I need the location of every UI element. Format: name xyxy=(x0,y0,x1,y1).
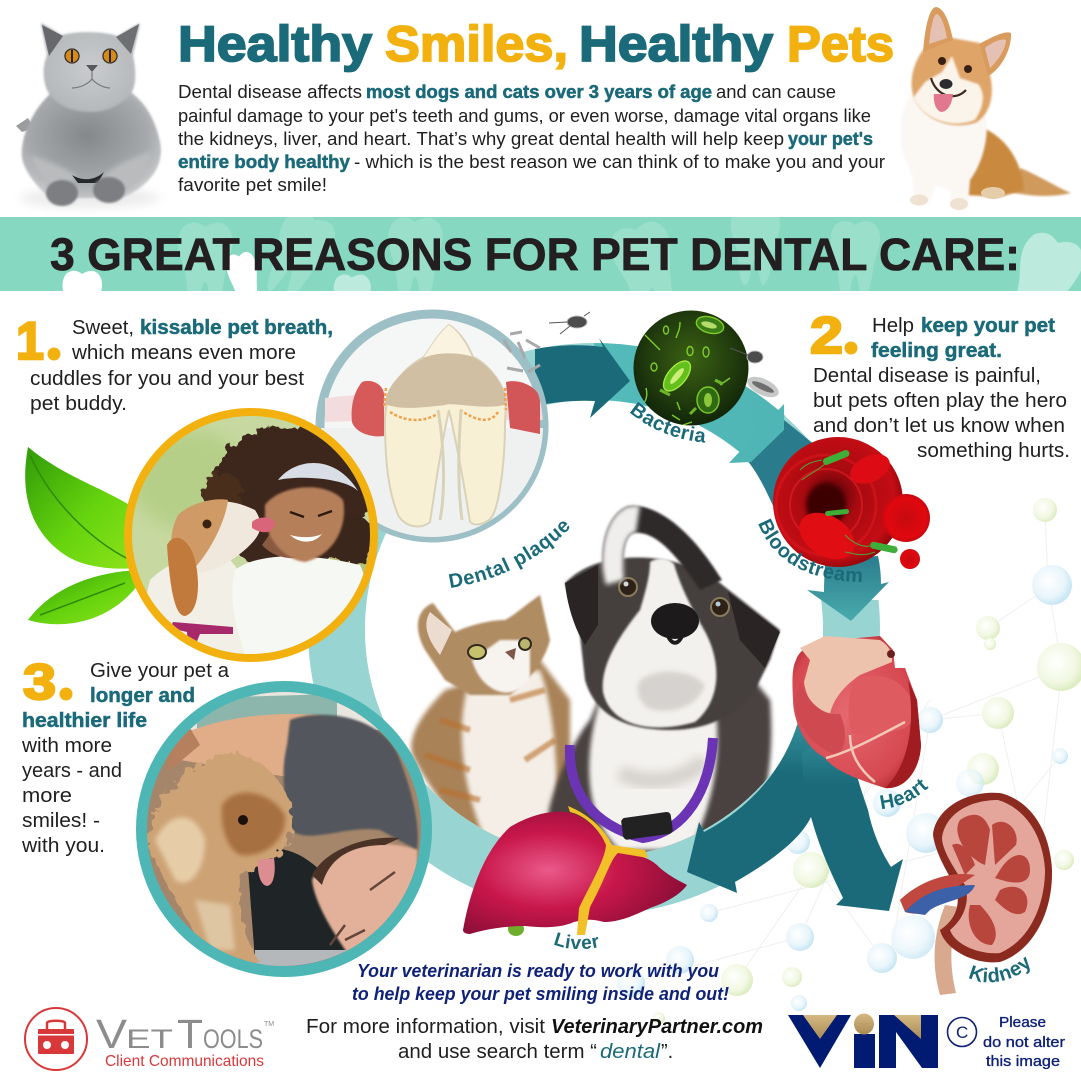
arrow: plaque to bacteria xyxy=(535,338,630,418)
VetTools logo: V xyxy=(96,1011,128,1057)
reason 2 text: Help xyxy=(872,315,914,337)
title: Healthy xyxy=(579,16,773,72)
copyright notice: this image xyxy=(986,1053,1060,1070)
banner xyxy=(0,205,1081,342)
VetTools logo: OOLS xyxy=(203,1024,263,1054)
more information text xyxy=(306,1016,763,1063)
copyright notice: C xyxy=(956,1023,968,1042)
curved organ labels xyxy=(448,402,1030,982)
reason 1 text: cuddles for you and your best xyxy=(30,368,304,390)
intro paragraph: and can cause xyxy=(716,82,836,102)
reason 3 text: longer and xyxy=(90,685,195,707)
fork arrows below heart xyxy=(687,722,903,911)
VetTools logo xyxy=(25,1008,274,1070)
arrow: heart to liver xyxy=(687,722,830,893)
puppy tail xyxy=(602,505,722,590)
copyright notice xyxy=(948,1014,1065,1070)
closing message: to help keep your pet smiling inside and out! xyxy=(352,984,729,1004)
VetTools logo: T xyxy=(177,1011,203,1057)
curved organ labels: Bloodstream xyxy=(758,518,862,582)
title: Smiles, xyxy=(385,16,568,72)
arrow: bacteria to bloodstream xyxy=(729,404,830,540)
intro paragraph: favorite pet smile! xyxy=(178,175,327,195)
leaves xyxy=(25,447,140,624)
plaque tooth illustration xyxy=(320,314,545,540)
reason 2 text xyxy=(810,307,1070,462)
title xyxy=(178,16,894,72)
copyright notice: Please xyxy=(999,1014,1046,1031)
photo: corgi xyxy=(900,7,1071,210)
VetTools logo: Client Communications xyxy=(105,1053,264,1070)
insects and grey bacterium xyxy=(549,312,782,401)
background molecule network xyxy=(617,498,1081,1024)
curved organ labels: Kidney xyxy=(968,956,1030,982)
more information text: ”. xyxy=(661,1041,673,1063)
cycle ring xyxy=(336,371,881,886)
arrow: bloodstream to heart xyxy=(807,556,889,621)
kitten xyxy=(411,595,570,850)
reason 3 text: healthier life xyxy=(22,710,147,732)
intro paragraph: the kidneys, liver, and heart. That’s why great dental health will help keep xyxy=(178,129,784,149)
title: Healthy xyxy=(178,16,372,72)
girl and dog photo circle xyxy=(120,405,390,667)
more information text: dental xyxy=(600,1041,661,1063)
reason 3 text: Give your pet a xyxy=(90,660,230,682)
reason 3 text: smiles! - xyxy=(22,810,100,832)
curved organ labels: Dental plaque xyxy=(448,522,570,588)
intro paragraph: - which is the best reason we can think of to make you and your xyxy=(354,152,885,172)
center photo: kitten and puppy xyxy=(365,557,825,861)
kidney xyxy=(900,793,1052,995)
reason 1 text: Sweet, xyxy=(72,317,134,339)
curved organ labels: Bacteria xyxy=(630,402,706,443)
reason 1 text: pet buddy. xyxy=(30,393,127,415)
bacteria sphere xyxy=(634,310,748,426)
reason 1 text xyxy=(16,312,333,415)
reason 2 text: but pets often play the hero xyxy=(813,390,1067,412)
VetTools logo: TM xyxy=(264,1021,274,1028)
arrow: heart to kidney xyxy=(802,730,903,911)
liver xyxy=(463,806,687,936)
reason 1 text: kissable pet breath, xyxy=(140,317,333,339)
reason 1 text: 1 xyxy=(16,312,44,371)
more information text: For more information, visit xyxy=(306,1016,545,1038)
intro paragraph xyxy=(178,82,885,195)
reason 3 text: years - and xyxy=(22,760,122,782)
closing message: Your veterinarian is ready to work with you xyxy=(357,961,719,981)
copyright notice: do not alter xyxy=(983,1034,1065,1051)
closing message xyxy=(352,961,729,1004)
reason 2 text: keep your pet xyxy=(921,315,1055,337)
title: Pets xyxy=(787,16,894,72)
more information text: and use search term “ xyxy=(398,1041,597,1063)
intro paragraph: entire body healthy xyxy=(178,152,350,172)
curved organ labels: Heart xyxy=(880,779,928,810)
reason 3 text: 3 xyxy=(23,654,56,710)
reason 3 text: with more xyxy=(21,735,112,757)
intro paragraph: painful damage to your pet's teeth and gums, or even worse, damage vital organs like xyxy=(178,106,871,126)
heart xyxy=(792,636,921,788)
man and poodle photo circle xyxy=(140,680,430,980)
reason 2 text: Dental disease is painful, xyxy=(813,365,1041,387)
VetTools logo: ET xyxy=(126,1024,173,1054)
reason 1 text: which means even more xyxy=(71,342,296,364)
intro paragraph: your pet's xyxy=(788,129,873,149)
more information text: VeterinaryPartner.com xyxy=(551,1016,763,1038)
photo: grey cat xyxy=(16,23,161,208)
reason 2 text: something hurts. xyxy=(917,440,1070,462)
bloodstream sphere xyxy=(773,437,930,569)
reason 2 text: 2 xyxy=(810,307,843,365)
reason 3 text: with you. xyxy=(21,835,105,857)
intro paragraph: Dental disease affects xyxy=(178,82,362,102)
banner: 3 GREAT REASONS FOR PET DENTAL CARE: xyxy=(50,229,1020,280)
puppy xyxy=(548,557,780,860)
reason 2 text: feeling great. xyxy=(871,340,1002,362)
curved organ labels: Liver xyxy=(554,932,598,949)
reason 3 text: more xyxy=(22,785,72,807)
VIN logo xyxy=(788,1014,938,1068)
reason 3 text xyxy=(21,654,230,857)
intro paragraph: most dogs and cats over 3 years of age xyxy=(366,82,712,102)
reason 2 text: and don’t let us know when xyxy=(813,415,1065,437)
